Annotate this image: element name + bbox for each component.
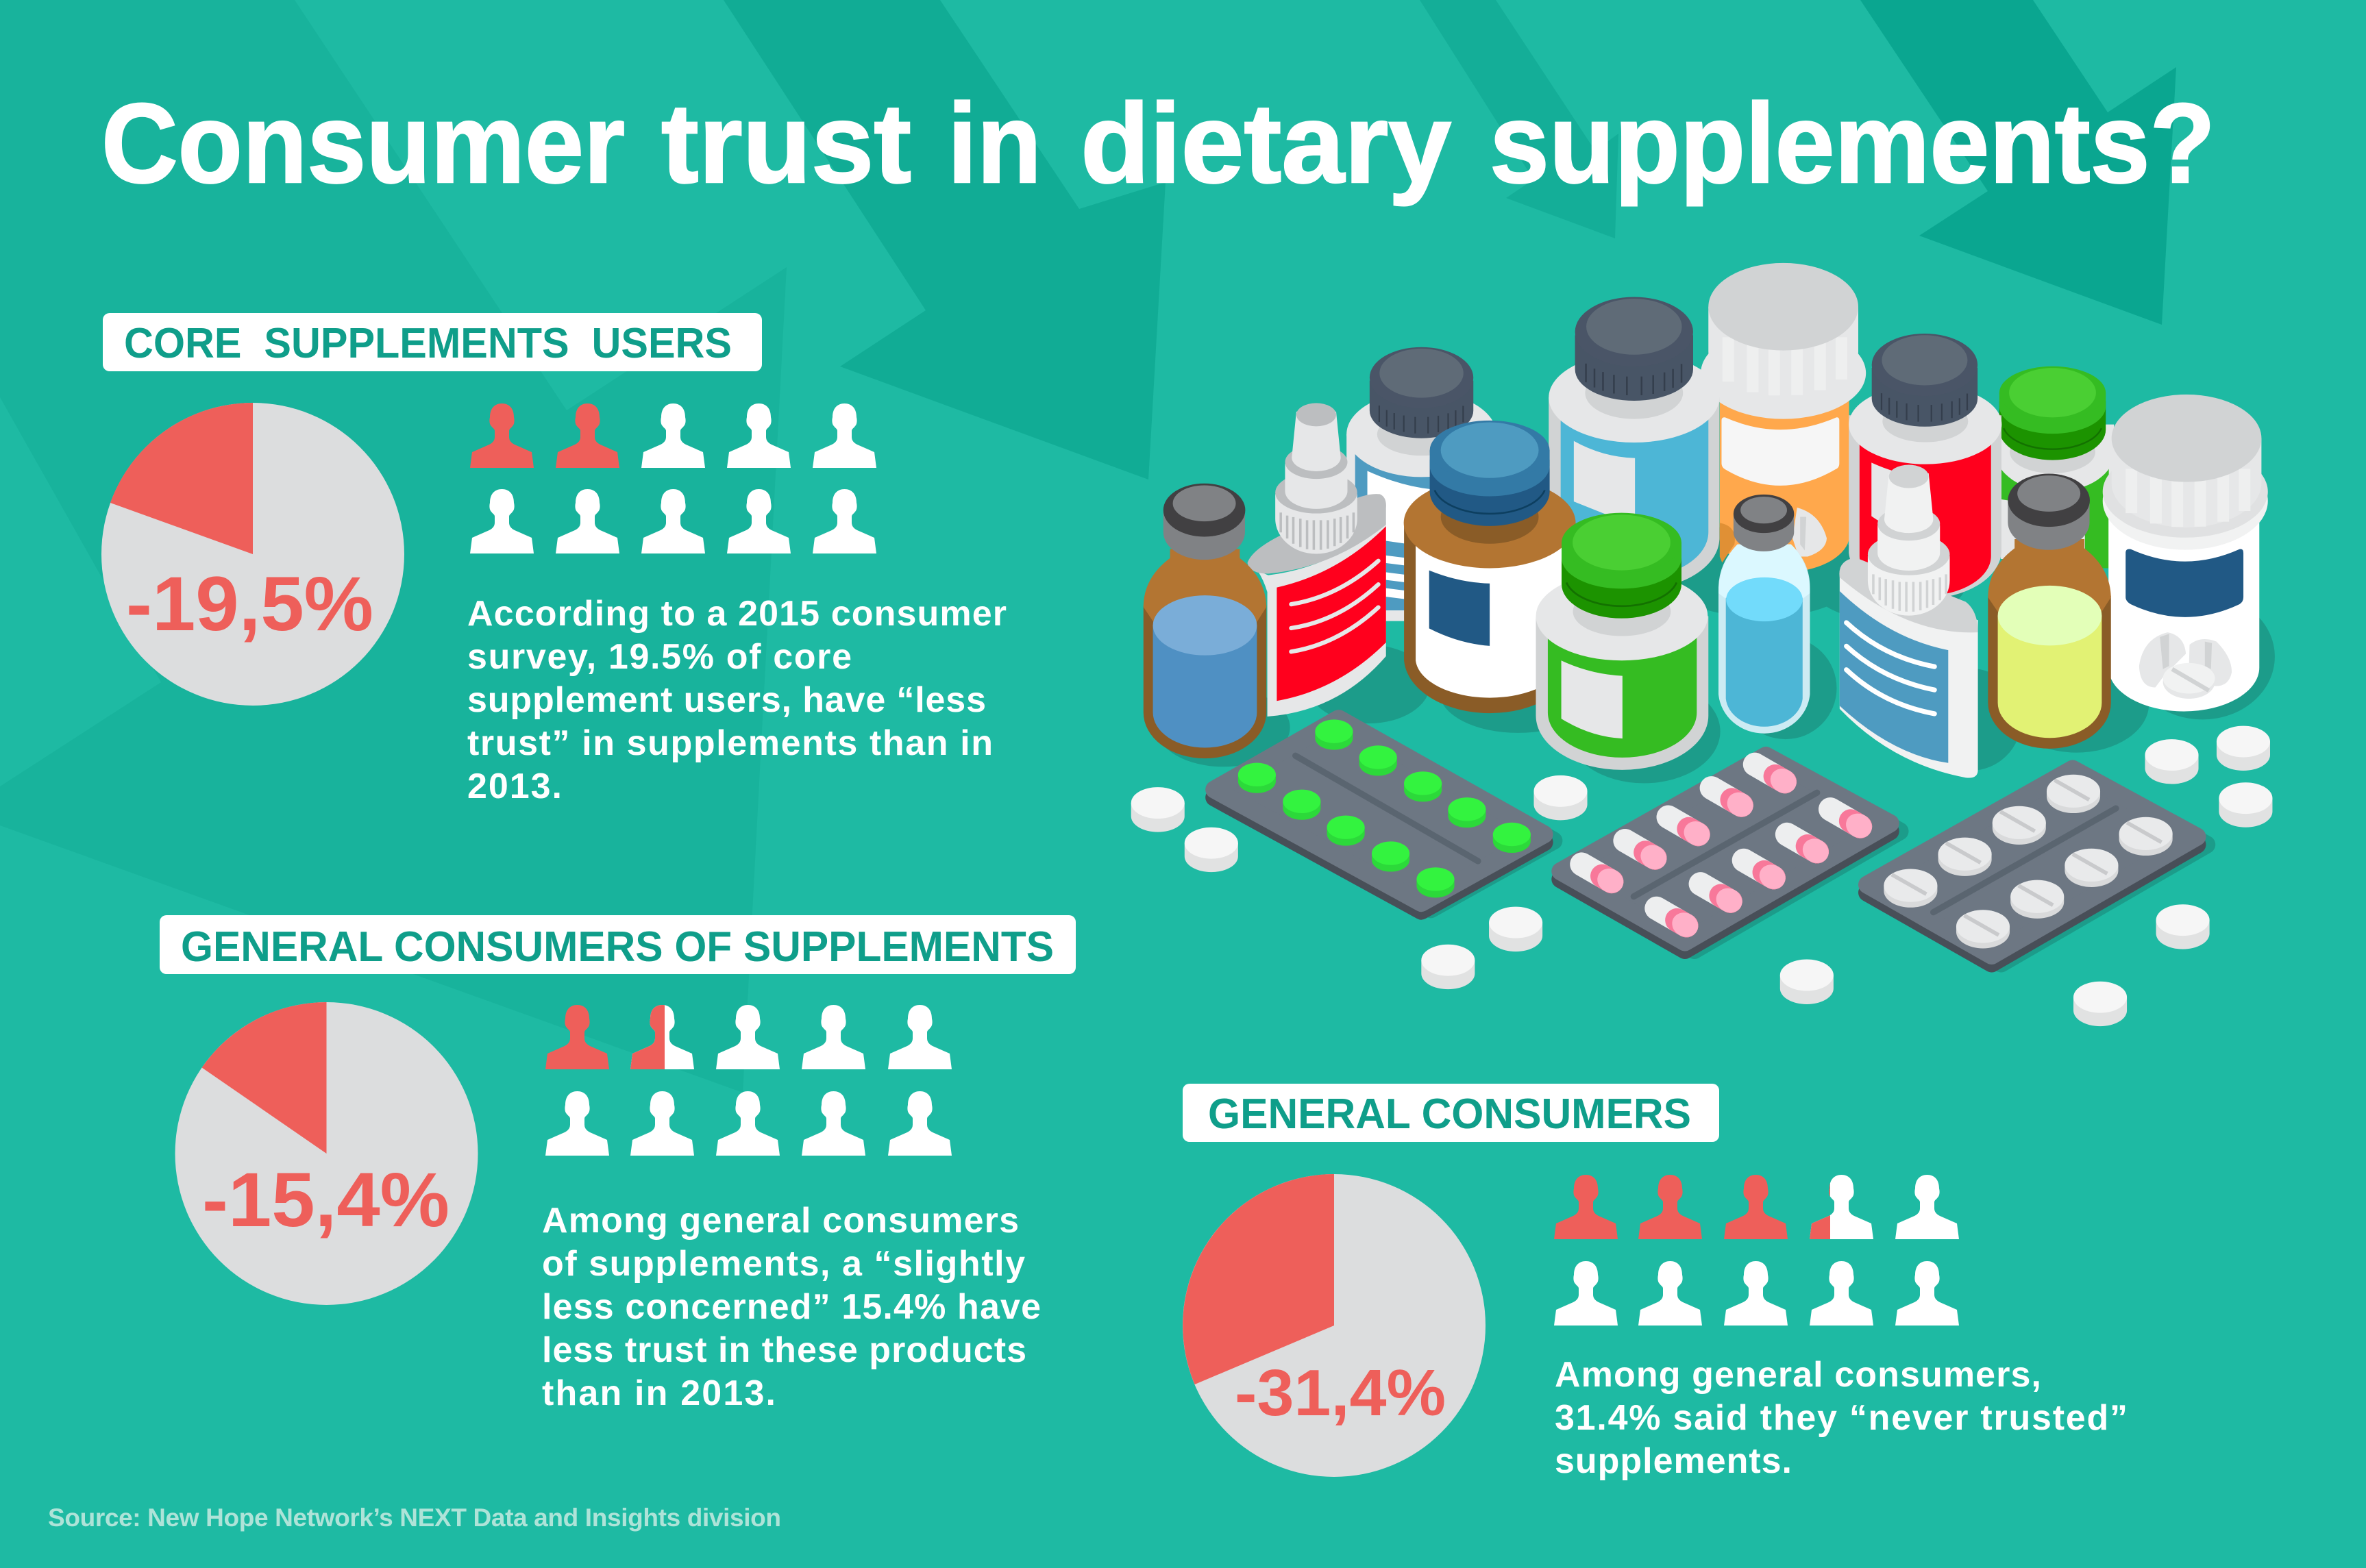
bottle: orange: [1701, 263, 1866, 572]
dropper bottle: blue: [1839, 465, 1978, 778]
bottle: red: [1849, 334, 2001, 599]
text block: general consumers description: supplements.: [1555, 1441, 1792, 1481]
panel: general consumers of supplements: [160, 915, 1076, 1413]
illustration: medicine bottles and blister packs: [1131, 263, 2275, 1026]
bottle: green back: [1995, 366, 2115, 568]
bottle: back left with dark cap: [1346, 347, 1496, 621]
title: [101, 80, 2215, 206]
person icons: 1.5 of 10 red: [545, 1005, 952, 1156]
title: dietary: [1081, 80, 1451, 206]
person icons: 3.3 of 10 red: [1554, 1175, 1959, 1326]
text block: core users description: 2013.: [467, 767, 562, 806]
person icons: 2 of 10 red: [470, 403, 876, 553]
title: trust: [661, 80, 911, 206]
bottle shadows: [1156, 523, 2275, 783]
text block: general consumers of supplements description: less concerned” 15.4% have: [542, 1287, 1041, 1327]
pie chart: -31,4%: [1183, 1174, 1486, 1477]
blister pack: pink capsules: [1561, 748, 1899, 950]
text block: core users description: supplement users, have “less: [467, 680, 986, 720]
pie chart: -31,4%: -31,4%: [1235, 1356, 1446, 1430]
text block: core users description: survey, 19.5% of core: [467, 637, 852, 677]
title: Consumer: [101, 80, 625, 206]
pie chart: -19,5%: [101, 403, 404, 706]
blister pack: green tablets: [1214, 719, 1553, 910]
title: in: [948, 80, 1042, 206]
blister pack: white tablets: [1867, 769, 2206, 963]
bottle: light blue: [1549, 297, 1719, 590]
panel: core supplements users: [101, 313, 1007, 806]
pie chart: -15,4%: [175, 1002, 478, 1305]
text block: general consumers description: [1555, 1355, 2128, 1481]
pie chart: -19,5%: -19,5%: [126, 561, 373, 647]
text block: core users description: trust” in supplements than in: [467, 723, 993, 763]
pie chart: -15,4%: -15,4%: [202, 1157, 449, 1243]
dropper bottle: red: [1248, 403, 1386, 717]
text block: general consumers of supplements description: Among general consumers: [542, 1201, 1019, 1241]
title: supplements?: [1490, 80, 2215, 206]
blister packs and loose tablets: [1131, 719, 2272, 1026]
vial: brown with yellow liquid: [1988, 474, 2111, 749]
text block: general consumers of supplements description: [542, 1201, 1041, 1413]
text block: general consumers of supplements description: less trust in these products: [542, 1330, 1026, 1370]
bottle: green front: [1536, 513, 1708, 770]
bottle: white with navy label and pills: [2103, 395, 2268, 711]
text block: core users description: [467, 594, 1007, 806]
bottle: brown with blue cap: [1404, 421, 1576, 713]
panel: general consumers: [1183, 1084, 2128, 1481]
text block: general consumers description: Among general consumers,: [1555, 1355, 2041, 1395]
text block: general consumers of supplements description: than in 2013.: [542, 1373, 776, 1413]
heading: general consumers: GENERAL CONSUMERS: [1208, 1091, 1691, 1138]
heading: general consumers of supplements: GENERAL CONSUMERS OF SUPPLEMENTS: [181, 923, 1054, 971]
text block: core users description: According to a 2015 consumer: [467, 594, 1007, 634]
text block: general consumers of supplements description: of supplements, a “slightly: [542, 1244, 1025, 1284]
loose white tablets: [1131, 726, 2272, 1026]
small water bottle: [1718, 495, 1810, 734]
vial: brown with blue liquid: [1144, 484, 1266, 758]
heading: core supplements users: CORE SUPPLEMENTS USERS: [124, 320, 732, 367]
source note: Source: New Hope Network’s NEXT Data and Insights division: [48, 1504, 781, 1532]
text block: general consumers description: 31.4% said they “never trusted”: [1555, 1398, 2128, 1438]
